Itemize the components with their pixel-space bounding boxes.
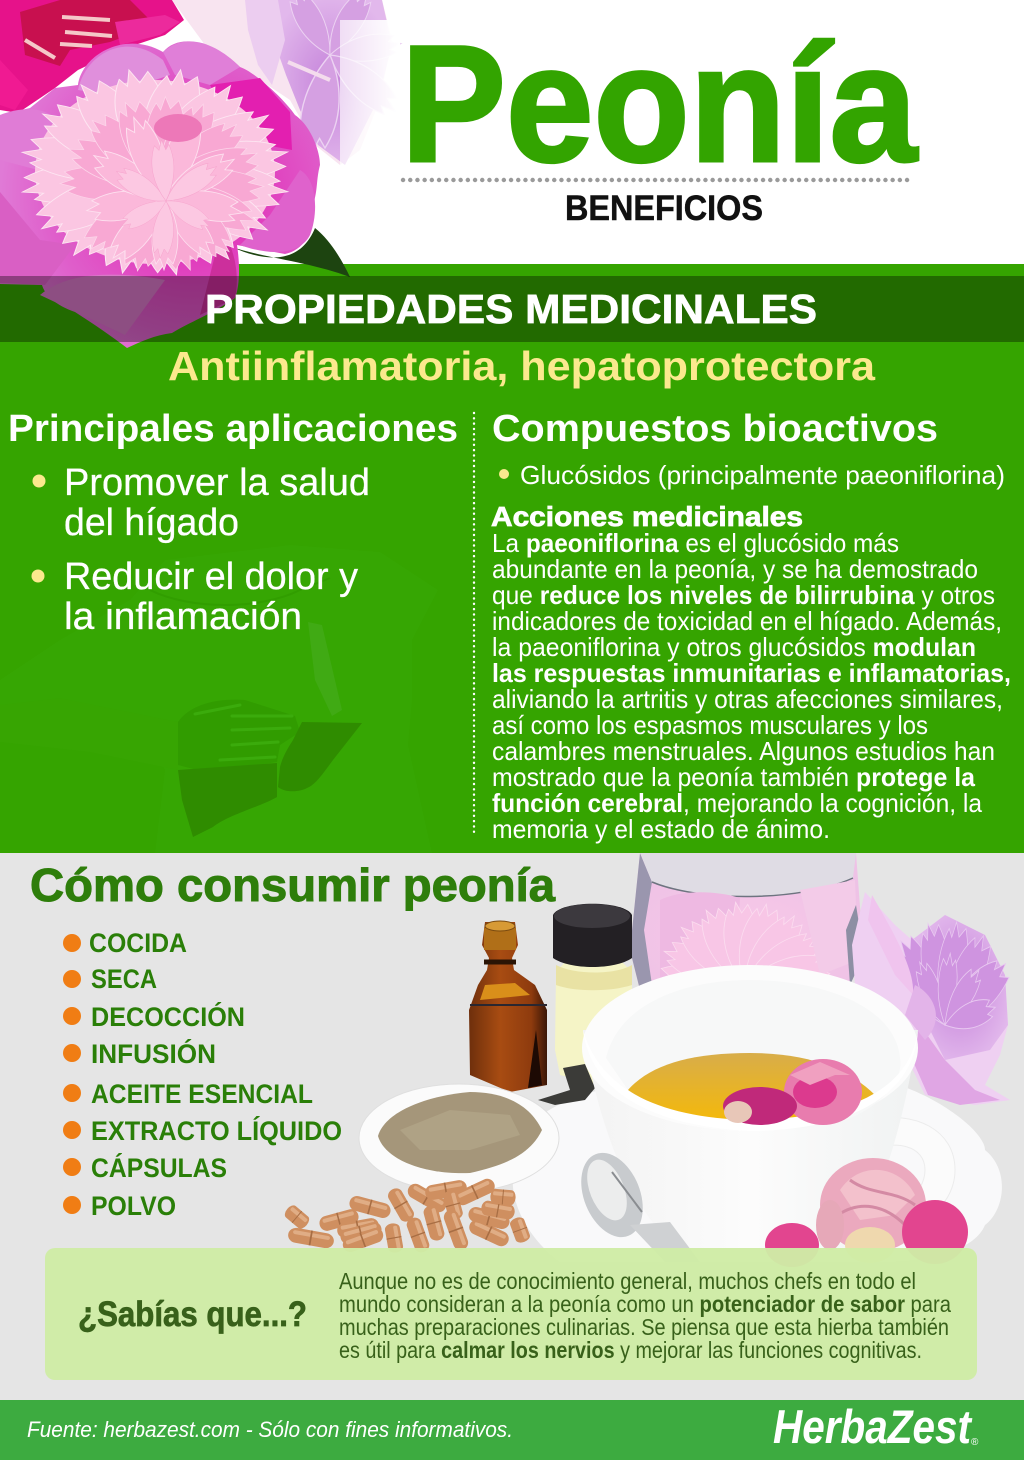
teacup [582, 965, 955, 1255]
properties list: Antiinflamatoria, hepatoprotectora [168, 343, 876, 389]
medicinal actions paragraph: función cerebral, mejorando la cognición, la [492, 788, 982, 818]
item: decoccion: DECOCCIÓN [91, 1001, 245, 1032]
pale lilac peony [172, 0, 406, 165]
item: capsulas: CÁPSULAS [91, 1152, 227, 1183]
medicinal actions paragraph: indicadores de toxicidad en el hígado. Además, [492, 606, 1002, 636]
panel: main applications [8, 408, 458, 638]
tea buds [723, 1059, 862, 1125]
item: cocida: COCIDA [89, 928, 187, 958]
application 2 [32, 556, 358, 638]
panel: bioactive compounds [491, 408, 1011, 844]
medicinal actions paragraph: que reduce los niveles de bilirrubina y otros [492, 580, 995, 610]
callout text: Aunque no es de conocimiento general, muchos chefs en todo el [339, 1268, 916, 1294]
medicinal actions paragraph: La paeoniflorina es el glucósido más [492, 528, 899, 558]
illustration: woman holding liver silhouette [0, 545, 438, 853]
item: extracto liquido: EXTRACTO LÍQUIDO [91, 1115, 342, 1146]
grey consumption section background [0, 853, 1024, 1400]
purple peony [852, 892, 1014, 1105]
capsules [283, 1176, 531, 1254]
green medicinal section background [0, 264, 1024, 853]
application 1: Promover la salud [64, 462, 370, 504]
medicinal actions paragraph: calambres menstruales. Algunos estudios han [492, 736, 995, 766]
callout text: muchas preparaciones culinarias. Se piensa que esta hierba también [339, 1314, 949, 1340]
heading: how to consume: Cómo consumir peonía [30, 859, 555, 911]
dark band behind properties heading [0, 276, 1024, 342]
column divider [473, 413, 475, 833]
item: seca: SECA [91, 964, 157, 994]
compound item: Glucósidos (principalmente paeoniflorina) [520, 460, 1005, 490]
application 2: la inflamación [64, 596, 302, 638]
application 2: Reducir el dolor y [64, 556, 358, 598]
item: seca [63, 964, 157, 994]
application 1 [32, 462, 370, 544]
logo: HerbaZest [773, 1400, 973, 1453]
item: aceite esencial: ACEITE ESENCIAL [91, 1079, 313, 1109]
dried peony buds [765, 1158, 968, 1267]
medicinal actions paragraph: así como los espasmos musculares y los [492, 710, 928, 740]
item: infusion: INFUSIÓN [91, 1038, 216, 1069]
heading: medicinal properties: PROPIEDADES MEDICINALES [205, 286, 817, 332]
dropper cap [538, 1064, 595, 1105]
medicinal actions paragraph: mostrado que la peonía también protege la [492, 762, 976, 792]
callout text: es útil para calmar los nervios y mejorar las funciones cognitivas. [339, 1337, 922, 1363]
spoon [570, 1144, 700, 1262]
medicinal actions paragraph: abundante en la peonía, y se ha demostrado [492, 554, 978, 584]
medicinal actions paragraph: la paeoniflorina y otros glucósidos modulan [492, 632, 976, 662]
saucer [513, 1080, 1002, 1262]
list: consumption forms [63, 928, 342, 1221]
heading: medicinal actions: Acciones medicinales [491, 501, 803, 532]
title: Peonía [401, 12, 919, 197]
main peony pink centre [17, 66, 293, 278]
medicinal actions paragraph: aliviando la artritis y otras afecciones similares, [492, 684, 1003, 714]
medicinal actions paragraph: las respuestas inmunitarias e inflamatorias, [492, 658, 1011, 688]
callout text: mundo consideran a la peonía como un potenciador de sabor para [339, 1291, 951, 1317]
main peony outer petals [0, 41, 320, 348]
deep pink peony [0, 0, 184, 113]
dark bottle [469, 921, 547, 1092]
heading: bioactive compounds: Compuestos bioactivos [492, 408, 938, 450]
plate with powder [359, 1084, 559, 1192]
medicinal actions paragraph: memoria y el estado de ánimo. [492, 814, 830, 844]
illustration: consumption forms still life [283, 853, 1014, 1267]
item: polvo: POLVO [91, 1191, 176, 1221]
footer [0, 1400, 1024, 1460]
dotted divider under title [403, 178, 912, 182]
heading: main applications: Principales aplicaciones [8, 408, 458, 450]
leaf [232, 228, 350, 277]
source text: Fuente: herbazest.com - Sólo con fines informativos. [27, 1417, 513, 1442]
faded white panel over lilac peony [340, 20, 400, 170]
medicinal actions paragraph [492, 528, 1011, 844]
clear oil bottle [553, 904, 632, 1085]
callout: did you know [45, 1248, 977, 1380]
callout text [339, 1268, 951, 1363]
illustration: peony flowers [0, 0, 406, 348]
application 1: del hígado [64, 502, 239, 544]
subtitle: BENEFICIOS [565, 189, 763, 228]
callout heading: ¿Sabías que...? [78, 1295, 307, 1334]
glass jar with peony [630, 853, 864, 1000]
logo: ® [971, 1437, 979, 1448]
